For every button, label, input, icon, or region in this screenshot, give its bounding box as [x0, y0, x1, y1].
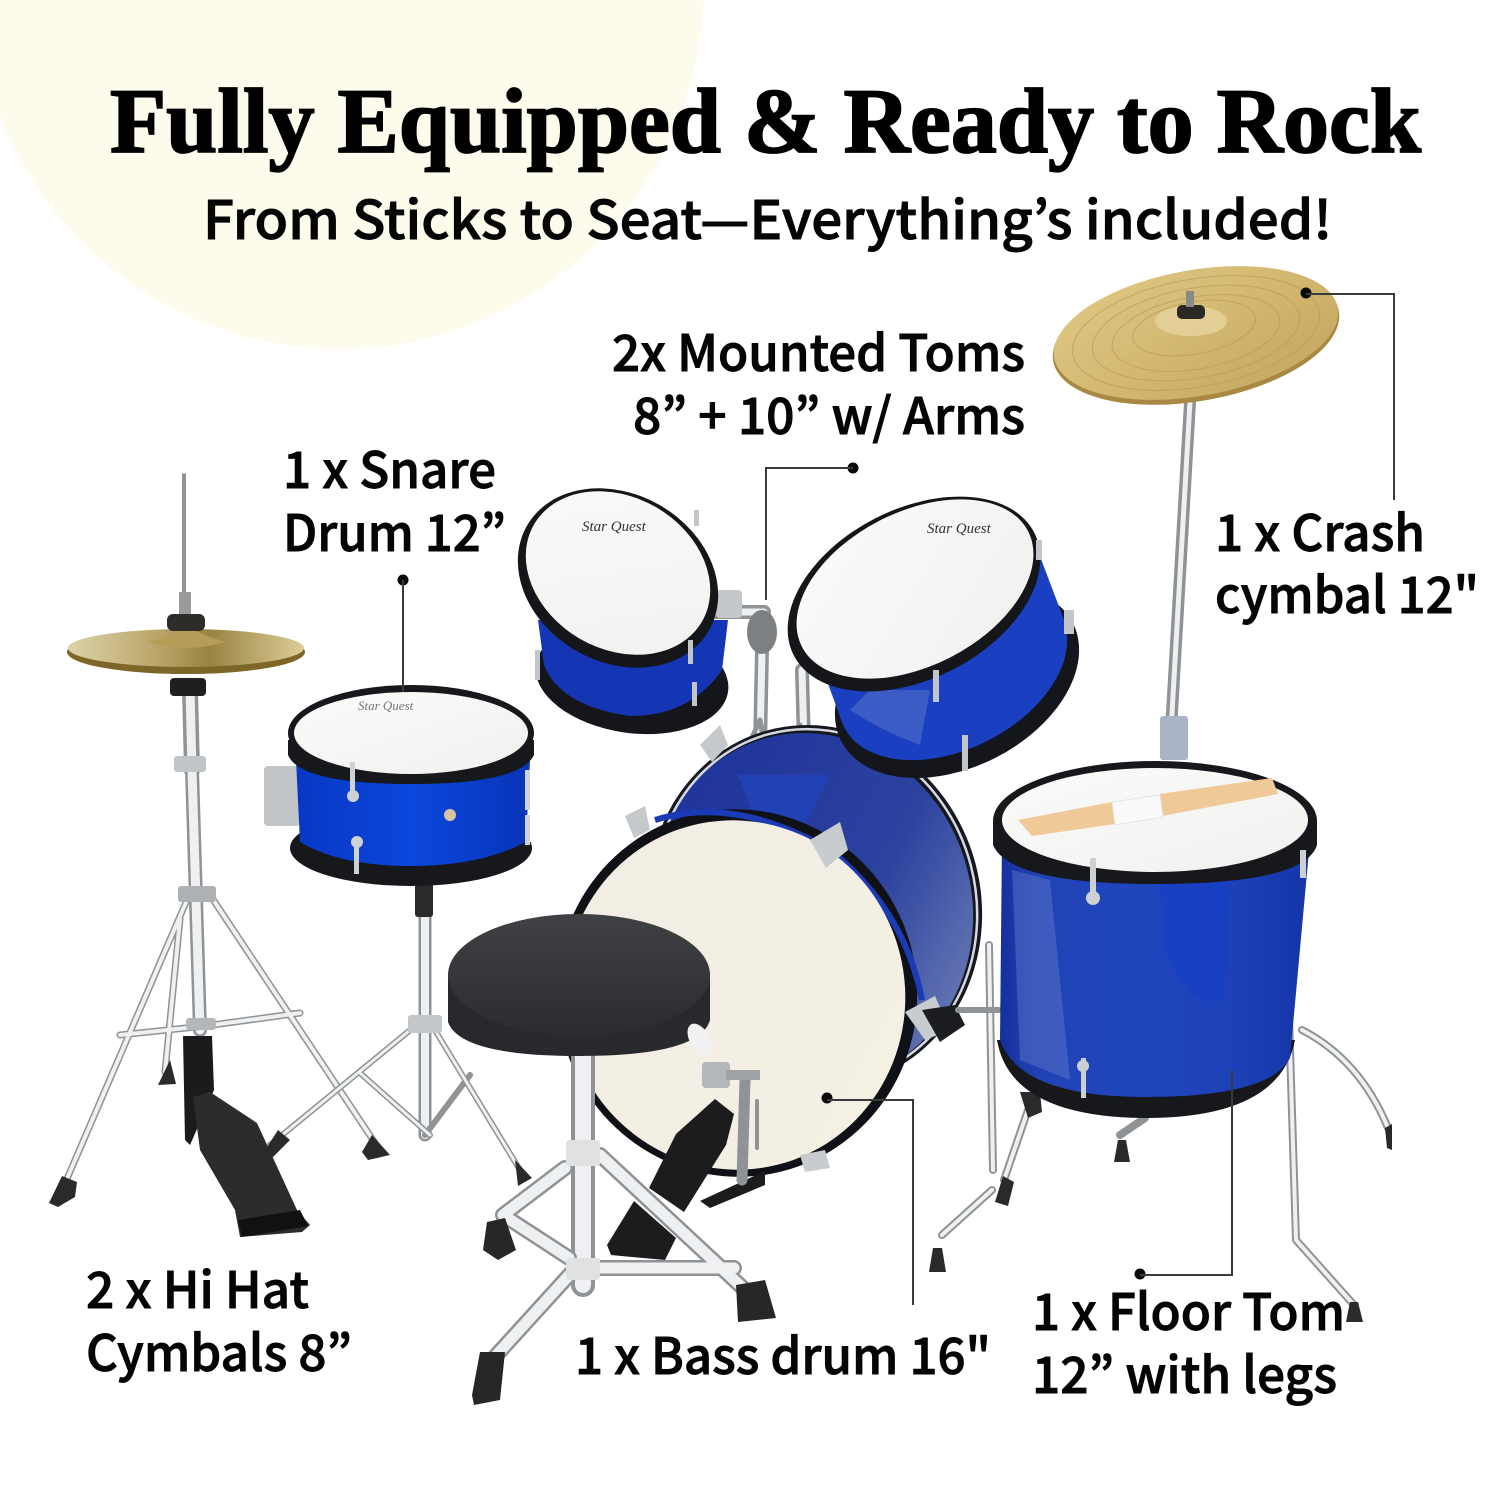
leader line: bass drum [822, 1092, 913, 1305]
label: crash [1215, 494, 1479, 628]
label: snare: 1 x Snare [283, 431, 496, 503]
leader line: snare [398, 574, 408, 692]
label: mounted toms: 8” + 10” w/ Arms [633, 377, 1025, 449]
mounted tom left: Star Quest [582, 519, 647, 535]
crash cymbal with stand [1042, 246, 1350, 760]
background pale yellow circle [0, 0, 704, 349]
leader line: floor tom [1134, 1070, 1232, 1280]
label: snare: Drum 12” [283, 494, 506, 566]
title: Fully Equipped & Ready to Rock [110, 70, 1422, 172]
bass drum pedal [607, 1062, 765, 1260]
bass drum shell [608, 687, 1022, 1125]
bass drum head [518, 771, 965, 1215]
floor tom with legs [929, 761, 1392, 1322]
label: floor tom [1032, 1273, 1345, 1408]
label: mounted toms [612, 314, 1025, 449]
label: snare [283, 431, 506, 566]
label: crash: 1 x Crash [1215, 494, 1425, 566]
drum sticks [1018, 778, 1278, 836]
mounted toms arm hardware [716, 590, 826, 782]
label: hi hat: Cymbals 8” [86, 1314, 352, 1386]
leader line: crash cymbal [1300, 288, 1394, 500]
snare drum: Star Quest [358, 698, 414, 713]
stool legs [472, 1050, 776, 1405]
mounted tom left [485, 453, 751, 746]
leader line: mounted toms [766, 462, 858, 600]
label: floor tom: 12” with legs [1032, 1336, 1337, 1408]
label: bass drum: 1 x Bass drum 16" [575, 1317, 991, 1389]
floor tom legs [929, 945, 1392, 1322]
snare drum [264, 685, 534, 886]
drum throne stool [448, 914, 776, 1405]
label: hi hat: 2 x Hi Hat [86, 1251, 309, 1323]
label: floor tom: 1 x Floor Tom [1032, 1273, 1345, 1345]
label: crash: cymbal 12" [1215, 556, 1479, 628]
snare stand [262, 862, 532, 1186]
label: mounted toms: 2x Mounted Toms [612, 314, 1025, 386]
label: hi hat [86, 1251, 352, 1386]
mounted tom right: Star Quest [927, 521, 992, 537]
hi hat pedal [183, 1036, 310, 1237]
subtitle: From Sticks to Seat—Everything’s included! [203, 179, 1332, 255]
mounted tom right [755, 457, 1111, 817]
hi hat cymbals with stand [49, 475, 390, 1237]
